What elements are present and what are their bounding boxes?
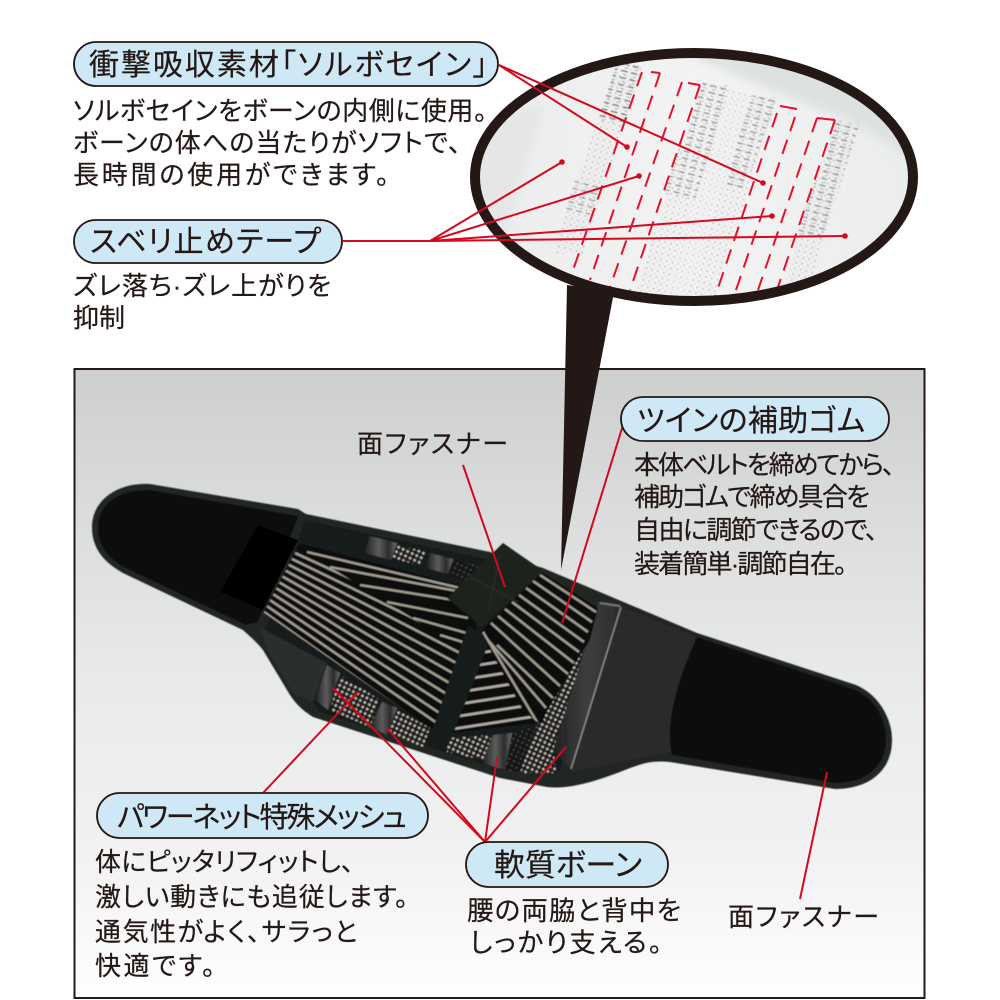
lower left grey panel xyxy=(260,627,327,702)
text: パワーネット description: 体にピッタリフィットし、 xyxy=(95,847,354,877)
label: 面ファスナー bottom: 面ファスナー xyxy=(728,902,879,932)
text: スベリ止めテープ description xyxy=(73,271,331,333)
text: 軟質ボーン description: 腰の両脇と背中を xyxy=(467,896,681,926)
lower strap stripes xyxy=(454,646,545,732)
text: パワーネット description: 快適です。 xyxy=(95,951,215,981)
pill: パワーネット特殊メッシュ xyxy=(97,793,428,838)
text: ソルボセイン description xyxy=(73,96,487,190)
left velcro tab xyxy=(98,490,298,625)
left hook patch xyxy=(220,525,298,610)
right grey panel xyxy=(572,607,697,772)
centre belt panel xyxy=(265,520,600,770)
lower bones and power-net mesh xyxy=(315,665,535,772)
text: パワーネット description: 激しい動きにも追従します。 xyxy=(95,882,408,912)
pill: ツインの補助ゴム xyxy=(621,397,889,441)
panel: product photo background xyxy=(74,369,924,998)
label: 面ファスナー top: 面ファスナー xyxy=(357,429,508,459)
leader lines in panel xyxy=(263,425,827,899)
text: パワーネット description: 通気性がよく、サラっと xyxy=(95,917,357,947)
text: 軟質ボーン description xyxy=(467,896,681,958)
text: スベリ止めテープ description: 抑制 xyxy=(73,303,125,333)
magnifier callout xyxy=(470,50,930,570)
left elastic strap stripes xyxy=(263,544,477,729)
text: ツインの補助ゴム description: 補助ゴムで締め具合を xyxy=(634,482,870,512)
text: ソルボセイン description: ソルボセインをボーンの内側に使用。 xyxy=(73,96,487,126)
pill: ツインの補助ゴム: ツインの補助ゴム xyxy=(637,405,865,438)
text: ツインの補助ゴム description: 本体ベルトを締めてから、 xyxy=(634,450,895,480)
belt photo xyxy=(92,484,892,789)
pill: 衝撃吸収素材「ソルボセイン」: 衝撃吸収素材「ソルボセイン」 xyxy=(89,49,488,82)
text: ツインの補助ゴム description: 自由に調節できるので、 xyxy=(634,515,878,545)
pill: 軟質ボーン xyxy=(466,842,668,887)
upper bone pieces xyxy=(364,536,480,582)
fabric close-up xyxy=(470,50,930,295)
vertical strap xyxy=(430,625,490,742)
right twin auxiliary elastic stripes xyxy=(480,572,598,724)
pill: パワーネット特殊メッシュ: パワーネット特殊メッシュ xyxy=(117,801,407,834)
lens background xyxy=(475,53,913,301)
red dashed stitching xyxy=(572,72,835,297)
right long bone xyxy=(553,602,622,770)
text: スベリ止めテープ description: ズレ落ち·ズレ上がりを xyxy=(73,271,331,301)
pill: スベリ止めテープ: スベリ止めテープ xyxy=(90,226,322,259)
upper wedge stripes xyxy=(306,550,470,644)
leader lines to lens with dots xyxy=(342,65,848,241)
centre velcro flap xyxy=(447,543,542,627)
text: ソルボセイン description: ボーンの体への当たりがソフトで、 xyxy=(73,128,461,158)
right velcro tab xyxy=(670,637,886,783)
text: ソルボセイン description: 長時間の使用ができます。 xyxy=(73,160,389,190)
text: ツインの補助ゴム description xyxy=(634,450,895,579)
lens rim xyxy=(475,53,913,301)
long mesh strip xyxy=(520,606,598,773)
pill: スベリ止めテープ xyxy=(74,220,342,263)
pill: 軟質ボーン: 軟質ボーン xyxy=(494,848,642,883)
text: パワーネット description xyxy=(95,847,408,981)
text: 軟質ボーン description: しっかり支える。 xyxy=(470,928,662,958)
belt body outline xyxy=(92,484,892,789)
text: ツインの補助ゴム description: 装着簡単·調節自在。 xyxy=(634,549,847,579)
callout tail xyxy=(561,285,614,570)
